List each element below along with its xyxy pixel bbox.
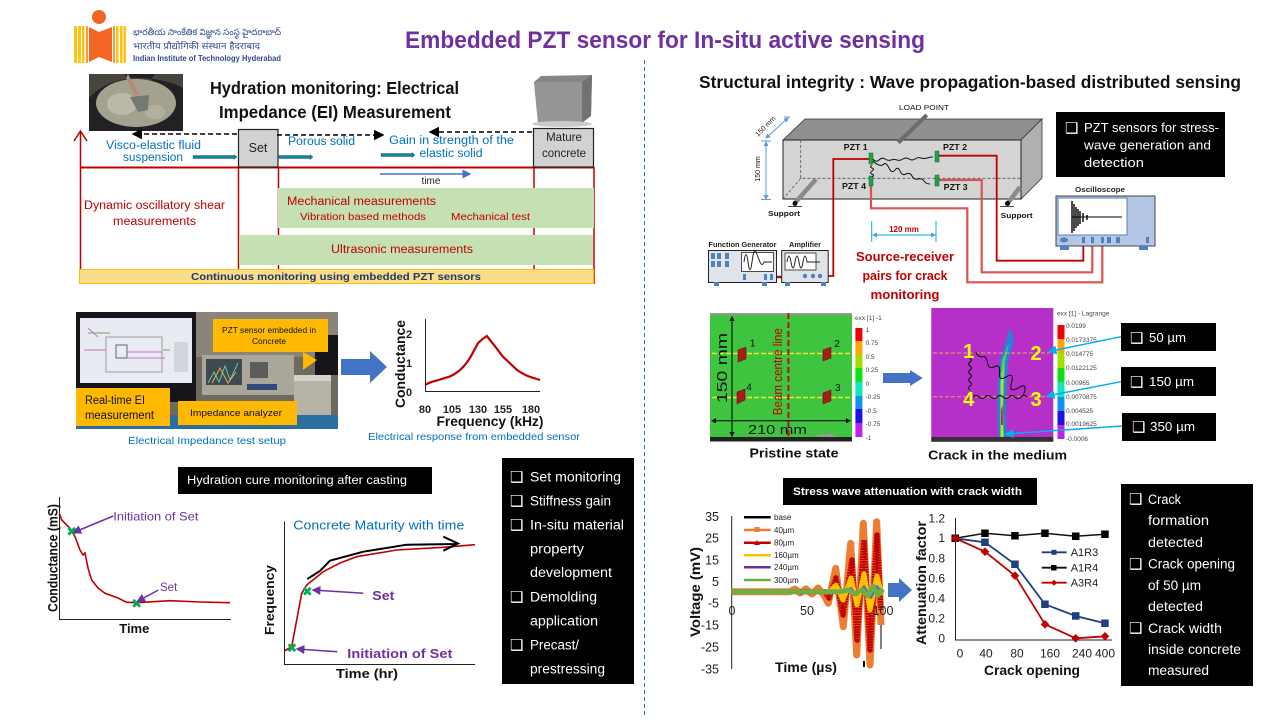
axis labels: 40	[979, 646, 993, 660]
chart: conductance vs frequency	[392, 319, 544, 429]
chart: attenuation factor	[913, 512, 1115, 678]
legend: crack colour bar: exx [1] - Lagrange	[1057, 310, 1110, 318]
axis labels: 0	[729, 604, 736, 618]
arrow: waveform to attenuation	[888, 578, 912, 602]
heading: hydration cure	[178, 467, 432, 494]
callout: hydration applications: ❑	[510, 588, 523, 606]
dimension: 120 mm: 120 mm	[889, 225, 919, 234]
label: source-receiver pairs: Source-receiver	[856, 249, 954, 264]
caption: pristine state: Pristine state	[750, 446, 838, 460]
series: A3R4	[951, 534, 1109, 643]
heading: hydration monitoring: Hydration monitoring: Electrical	[210, 78, 459, 98]
icon: logo emblem	[74, 10, 126, 63]
labels: beam: 150 mm	[755, 115, 777, 138]
image: pristine strain map: 1	[750, 338, 756, 350]
image: pristine strain map: 3	[835, 383, 841, 394]
band: ultrasonic measurements	[239, 235, 593, 265]
legend: waveforms: base	[774, 513, 792, 522]
chart: conductance vs time: Initiation of Set	[113, 510, 199, 524]
callout: hydration applications: development	[530, 565, 612, 580]
sensors: PZT patches: PZT 2	[943, 142, 967, 152]
teal arrows	[193, 152, 415, 160]
image: pristine strain map: 210 mm	[748, 422, 807, 437]
axis labels: 25	[705, 532, 719, 546]
heading: stress wave attenuation	[783, 478, 1037, 505]
band: continuous monitoring	[80, 270, 594, 284]
legend: pristine colour bar: -0.25	[866, 394, 881, 401]
instrument: function generator	[708, 240, 777, 286]
panel: electrical impedance test setup	[76, 312, 581, 447]
caption: crack in the medium: Crack in the medium	[928, 448, 1067, 462]
band: mechanical measurements: Mechanical measurements	[287, 196, 436, 208]
axis labels: 160	[1040, 646, 1060, 660]
stage: gain in strength	[389, 135, 514, 160]
stage: Mature concrete	[534, 128, 594, 167]
callout: crack detection	[1121, 484, 1253, 686]
callout: hydration applications: Stiffness gain	[530, 494, 611, 508]
sensors: PZT patches	[842, 142, 968, 192]
stage: Set: Set	[249, 141, 268, 155]
legend: pristine colour bar	[855, 315, 882, 442]
legend: waveforms: 80µm	[774, 538, 795, 548]
axis labels: 80	[1010, 646, 1024, 660]
axis labels: -35	[701, 662, 719, 676]
callout: 50 micron: ❑	[1130, 329, 1143, 347]
chart: frequency vs time: Concrete Maturity with time	[293, 518, 464, 532]
band: mechanical measurements: Mechanical test	[451, 211, 530, 223]
wave paths between sensors	[870, 157, 933, 184]
callout: hydration applications: prestressing	[530, 662, 605, 676]
callout: hydration applications: Precast/	[530, 638, 579, 652]
heading: hydration monitoring: Impedance (EI) Measurement	[219, 102, 451, 122]
caption: electrical response: Electrical response from embedded sensor	[368, 431, 581, 443]
label: source-receiver pairs: monitoring	[870, 287, 940, 302]
callout: hydration applications: ❑	[510, 636, 523, 654]
legend: pristine colour bar: 0	[866, 381, 870, 388]
callout: crack detection: measured	[1148, 663, 1209, 678]
chart: conductance vs frequency: 180	[522, 404, 540, 416]
legend: crack colour bar: 0.0173375	[1066, 337, 1097, 344]
band: ultrasonic measurements: Ultrasonic measurements	[331, 244, 473, 256]
legend: crack colour bar: 0.0122125	[1066, 365, 1097, 372]
chart: conductance vs frequency: 130	[469, 404, 487, 416]
stage: Set	[238, 130, 278, 167]
callout: crack detection: Crack opening	[1148, 556, 1235, 572]
legend: crack colour bar: 0.0019625	[1066, 421, 1097, 428]
label: real-time EI measurement: Real-time EI	[85, 395, 145, 407]
axis labels: 0.6	[928, 572, 945, 586]
legend: pristine colour bar: -0.5	[866, 408, 877, 415]
arrow: setup to response	[341, 351, 387, 383]
image: cracked strain map: 3	[1030, 389, 1042, 411]
label: impedance analyzer	[178, 401, 297, 425]
callout: 150 micron: ❑	[1130, 373, 1143, 391]
callout: 350 micron	[1122, 413, 1216, 441]
legend: pristine colour bar: 0.75	[866, 340, 879, 347]
series: A1R3	[955, 538, 1109, 627]
instrument: oscilloscope	[1056, 185, 1155, 250]
axis labels: 0	[957, 646, 964, 660]
instrument: amplifier	[782, 240, 828, 286]
logo: IIT Hyderabad	[74, 10, 282, 63]
callout: 50 micron	[1121, 323, 1216, 351]
title: Embedded PZT sensor for In-situ active sensing	[405, 27, 925, 54]
callout: hydration applications: ❑	[510, 492, 523, 510]
callout: crack detection: detected	[1148, 599, 1203, 614]
axis labels: 240	[1072, 646, 1092, 660]
chart: voltage vs time: Voltage (mV)	[687, 547, 703, 637]
chart: conductance vs time: Set	[160, 582, 178, 594]
legend: attenuation series: A1R4	[1071, 562, 1098, 574]
legend: pristine colour bar: 0.25	[866, 367, 879, 374]
instrument: function generator: Function Generator	[708, 240, 777, 249]
legend: pristine colour bar: 1	[866, 327, 870, 334]
callout: PZT sensors	[1056, 112, 1225, 177]
callout: crack detection: inside concrete	[1148, 642, 1241, 657]
axis labels: 1.2	[928, 512, 945, 526]
axis labels: 5	[712, 575, 719, 589]
stage: Mature concrete: concrete	[542, 148, 586, 160]
caption: test setup: Electrical Impedance test setup	[128, 435, 286, 447]
axis labels: -5	[708, 596, 719, 610]
dashed arrows	[133, 132, 532, 135]
legend: crack colour bar: 0.0199	[1066, 323, 1086, 330]
chart: frequency vs time: Set	[372, 588, 395, 603]
dimension lines: beam	[761, 117, 790, 200]
callout: crack detection: ❑	[1129, 490, 1142, 508]
chart: frequency vs time: ✖	[287, 640, 297, 656]
callout: crack detection: ❑	[1129, 619, 1142, 637]
callout: hydration applications: application	[530, 614, 598, 628]
arrow: pristine to crack	[883, 370, 923, 386]
callout arrows: crack widths	[1006, 337, 1122, 434]
panel: crack in the medium	[928, 308, 1216, 462]
stage: visco-elastic: suspension	[123, 152, 183, 164]
label: dynamic oscillatory shear	[84, 200, 225, 228]
labels: beam	[755, 103, 1033, 220]
axis labels: 15	[705, 554, 719, 568]
legend: attenuation series	[1042, 547, 1098, 590]
photo: concrete cube	[532, 75, 592, 127]
chart: voltage vs time	[687, 510, 893, 676]
callout: hydration applications: Set monitoring	[530, 470, 621, 484]
chart: frequency vs time	[262, 518, 475, 681]
callout: crack detection: ❑	[1129, 555, 1142, 573]
axis labels: 0	[938, 632, 945, 646]
stage: gain in strength: elastic solid	[420, 148, 482, 160]
chart: conductance vs frequency: 1	[406, 358, 412, 370]
axis labels	[701, 510, 893, 676]
legend: waveforms: 240µm	[774, 563, 799, 572]
chart: conductance vs frequency: 80	[419, 404, 431, 416]
logo text: Indian Institute of Technology Hyderabad	[133, 53, 281, 63]
axis labels: 0.2	[928, 612, 945, 626]
label: PZT sensor embedded: PZT sensor embedded in	[222, 325, 316, 335]
band: continuous monitoring: Continuous monitoring using embedded PZT sensors	[191, 271, 481, 283]
label: real-time EI measurement	[76, 388, 170, 426]
image: pristine strain map	[710, 313, 852, 442]
band: mechanical measurements: Vibration based methods	[300, 211, 426, 223]
callout: crack detection: detected	[1148, 535, 1203, 550]
callout: hydration applications: Demolding	[530, 590, 597, 604]
legend: waveforms	[744, 513, 799, 585]
label: source-receiver pairs: pairs for crack	[862, 268, 948, 283]
callout: crack detection: Crack	[1148, 492, 1181, 507]
callout: 50 micron: 50 µm	[1149, 330, 1186, 345]
instrument: oscilloscope: Oscilloscope	[1075, 185, 1125, 194]
label: impedance analyzer: Impedance analyzer	[190, 408, 282, 419]
legend: pristine colour bar: 0.5	[866, 354, 875, 361]
label: dynamic oscillatory shear: measurements	[113, 216, 196, 228]
chart: conductance vs frequency: Frequency (kHz)	[436, 413, 544, 429]
callout: hydration applications	[502, 458, 634, 684]
chart: conductance vs frequency: Conductance	[392, 320, 408, 408]
label: PZT sensor embedded	[213, 319, 328, 370]
chart: voltage vs time: Time (µs)	[775, 659, 837, 675]
labels: beam: LOAD POINT	[899, 103, 949, 112]
axis labels: 0.8	[928, 552, 945, 566]
instrument: amplifier: Amplifier	[789, 240, 821, 249]
chart: conductance vs frequency: 155	[494, 404, 512, 416]
chart: conductance vs time: Conductance (mS)	[46, 504, 60, 612]
chart: frequency vs time: ✖	[302, 584, 313, 599]
panel: hydration monitoring timeline	[74, 74, 594, 284]
panel: pristine state	[710, 313, 882, 460]
label: dynamic oscillatory shear: Dynamic oscillatory shear	[84, 200, 225, 212]
callout: PZT sensors: detection	[1084, 155, 1144, 170]
chart: frequency vs time: Initiation of Set	[347, 646, 453, 661]
axis labels: 1	[938, 531, 945, 545]
legend: waveforms: 300µm	[774, 576, 799, 585]
sensors: PZT patches: PZT 1	[844, 142, 868, 152]
callout: 350 micron: 350 µm	[1150, 419, 1195, 434]
callout: hydration applications: In-situ material	[530, 518, 624, 532]
callout: 350 micron: ❑	[1132, 418, 1145, 436]
legend: crack colour bar: 0.004525	[1066, 408, 1093, 415]
sensors: PZT patches: PZT 3	[944, 182, 968, 192]
logo text: भारतीय प्रौद्योगिकी संस्थान हैदराबाद	[133, 40, 260, 51]
legend: crack colour bar: -0.0006	[1066, 436, 1088, 443]
callout: PZT sensors: wave generation and	[1083, 138, 1211, 152]
band: mechanical measurements	[278, 188, 594, 228]
centre divider	[644, 60, 646, 716]
image: pristine strain map: 4	[746, 382, 752, 394]
image: pristine strain map: 2	[834, 339, 840, 350]
callout: PZT sensors: PZT sensors for stress-	[1084, 120, 1219, 135]
labels: beam: Support	[768, 209, 801, 218]
callout: crack detection: formation	[1148, 513, 1209, 528]
legend: pristine colour bar: exx [1] -1	[855, 315, 882, 322]
photo: fresh concrete paste	[89, 74, 183, 131]
chart: attenuation factor: Attenuation factor	[913, 520, 929, 645]
legend: pristine colour bar: -1	[866, 435, 872, 442]
chart: conductance vs time: Time	[119, 621, 149, 636]
stage: visco-elastic: Visco-elastic fluid	[106, 140, 201, 152]
legend: crack colour bar: 0.00965	[1066, 380, 1090, 387]
timeline axes	[74, 131, 594, 284]
chart: conductance vs time	[46, 497, 231, 636]
axis labels: 50	[800, 604, 814, 618]
image: pristine strain map: 150 mm	[715, 333, 731, 403]
photo: test setup	[76, 312, 338, 429]
time arrow: time	[422, 176, 441, 187]
diagram: concrete beam	[783, 115, 1042, 206]
logo text	[133, 26, 282, 63]
axis labels: -15	[701, 618, 719, 632]
labels: beam: Support	[1001, 211, 1033, 220]
dimension: 120 mm	[872, 221, 936, 242]
legend: crack colour bar: 0.014775	[1066, 351, 1093, 358]
sensors: PZT patches: PZT 4	[842, 181, 866, 191]
chart: conductance vs frequency: 105	[443, 404, 461, 416]
chart: frequency vs time: Frequency	[262, 564, 277, 635]
callout: crack detection: of 50 µm	[1148, 578, 1201, 593]
label: PZT sensor embedded: Concrete	[252, 336, 286, 346]
legend: crack colour bar	[1057, 310, 1110, 443]
legend: waveforms: 40µm	[774, 526, 795, 535]
chart: conductance vs time: ✖	[131, 596, 142, 611]
legend: pristine colour bar: -0.75	[866, 421, 881, 428]
legend: attenuation series: A3R4	[1071, 578, 1098, 590]
logo text: భారతీయ సాంకేతిక విజ్ఞాన సంస్థ హైదరాబాద్	[133, 26, 282, 40]
axis labels: 35	[705, 510, 719, 524]
legend: attenuation series: A1R3	[1071, 547, 1098, 559]
callout: hydration applications: ❑	[510, 468, 523, 486]
legend: crack colour bar: 0.0070875	[1066, 394, 1097, 401]
chart: conductance vs frequency: 0	[406, 387, 412, 399]
series: A1R4	[952, 530, 1109, 542]
axis labels: 0.4	[928, 592, 945, 606]
image: cracked strain map: 4	[963, 389, 975, 411]
image: cracked strain map	[931, 308, 1053, 442]
stage: Mature concrete: Mature	[546, 132, 582, 144]
callout: PZT sensors: ❑	[1065, 119, 1078, 137]
heading: hydration cure: Hydration cure monitoring after casting	[187, 475, 407, 487]
labels: beam: 150 mm	[755, 156, 762, 182]
heading: hydration monitoring	[210, 78, 459, 122]
stage: visco-elastic	[106, 140, 201, 164]
callout: hydration applications: ❑	[510, 516, 523, 534]
time arrow	[380, 174, 470, 187]
label: real-time EI measurement: measurement	[85, 410, 155, 422]
axis labels	[928, 512, 1115, 660]
stage: gain in strength: Gain in strength of the	[389, 135, 514, 147]
chart: conductance vs frequency: 2	[406, 329, 412, 341]
wires: signal cables	[776, 156, 1102, 282]
axis labels: 100	[873, 604, 893, 618]
heading: stress wave attenuation: Stress wave attenuation with crack width	[793, 486, 1022, 498]
axis labels: -25	[701, 640, 719, 654]
chart: frequency vs time: Time (hr)	[336, 666, 398, 681]
stage: porous solid: Porous solid	[288, 136, 355, 148]
callout: 150 micron: 150 µm	[1149, 374, 1194, 389]
image: pristine strain map: Beam centre line	[770, 328, 785, 415]
callout: crack detection: Crack width	[1148, 621, 1222, 636]
legend: waveforms: 160µm	[774, 551, 799, 560]
chart: attenuation factor: Crack opening	[984, 662, 1080, 678]
panel: beam test diagram	[708, 103, 1155, 302]
image: cracked strain map: 2	[1030, 343, 1042, 365]
waveforms	[732, 519, 883, 668]
heading: structural integrity: Structural integrity : Wave propagation-based distributed sensing	[699, 72, 1241, 92]
image: cracked strain map: 1	[963, 341, 974, 363]
callout: 150 micron	[1121, 367, 1216, 396]
chart: conductance vs time: ✖	[66, 524, 77, 539]
axis labels: 400	[1095, 646, 1115, 660]
label: source-receiver pairs	[856, 249, 954, 302]
callout: hydration applications: property	[530, 542, 584, 556]
panel: hydration cure monitoring	[46, 467, 475, 681]
